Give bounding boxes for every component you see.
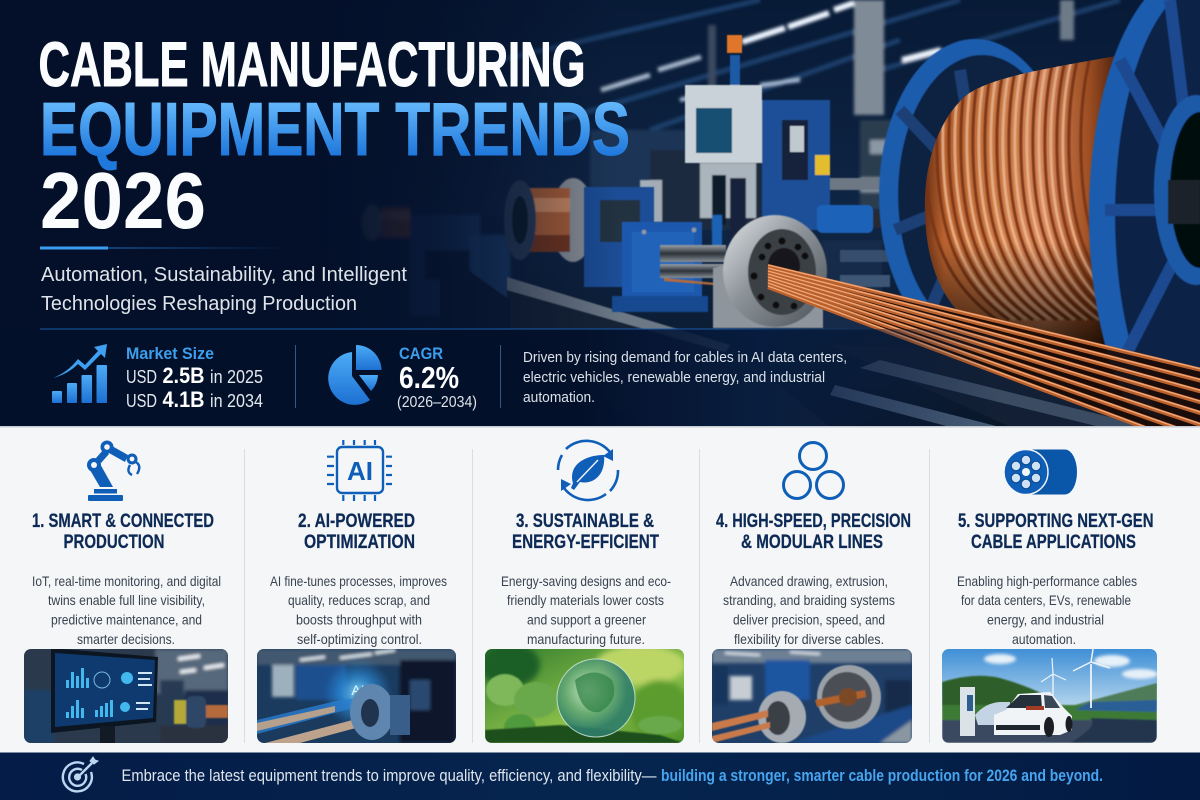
icon: cable cross-section <box>1004 450 1077 494</box>
title: EQUIPMENT TRENDS <box>40 87 630 171</box>
demand drivers text: automation. <box>523 390 595 406</box>
title <box>38 30 630 245</box>
heading: CABLE APPLICATIONS <box>971 532 1136 553</box>
description: flexibility for diverse cables. <box>734 632 884 647</box>
panel: hero factory scene <box>0 0 1200 460</box>
card 4: high-speed precision modular lines <box>712 442 912 743</box>
front spool flange <box>1089 0 1200 460</box>
copper strands <box>767 264 1200 426</box>
heading <box>32 511 214 553</box>
market size stat: in 2025 <box>210 366 263 387</box>
call to action text: Embrace the latest equipment trends to improve quality, efficiency, and flexibility— <box>122 767 657 785</box>
blue machine block <box>584 187 708 312</box>
copper coil drum <box>924 56 1115 345</box>
photo: monitoring dashboard <box>24 648 228 743</box>
description: Energy-saving designs and eco- <box>501 574 671 589</box>
wind turbines <box>1041 649 1110 708</box>
description: stranding, and braiding systems <box>723 593 895 608</box>
card 5: next-gen cable applications <box>942 450 1158 743</box>
ceiling lights and structure <box>500 0 1120 210</box>
panel: stats strip <box>0 328 1000 427</box>
heading: 5. SUPPORTING NEXT-GEN <box>958 511 1154 532</box>
description: smarter decisions. <box>77 632 175 647</box>
icon: three rings <box>784 442 844 498</box>
demand drivers text: electric vehicles, renewable energy, and industrial <box>523 370 825 386</box>
accent rule <box>40 246 288 250</box>
control cabinet <box>685 35 890 287</box>
demand drivers text: Driven by rising demand for cables in AI data centers, <box>523 350 847 366</box>
description: quality, reduces scrap, and <box>288 593 430 608</box>
demand drivers text <box>523 350 847 406</box>
icon: AI chip <box>327 440 392 501</box>
description <box>501 574 671 647</box>
description: boosts throughput with <box>296 612 422 628</box>
description: deliver precision, speed, and <box>733 612 885 628</box>
description: manufacturing future. <box>527 632 645 647</box>
photo: glass globe in leaves <box>485 649 684 743</box>
card 2: AI-powered optimization <box>257 440 456 743</box>
description: Enabling high-performance cables <box>957 574 1137 589</box>
heading: ENERGY-EFFICIENT <box>512 532 659 553</box>
heading: 4. HIGH-SPEED, PRECISION <box>716 511 911 532</box>
heading <box>298 511 415 553</box>
steel hub disc <box>713 215 827 328</box>
subtitle <box>41 263 407 315</box>
back spool flange <box>878 38 1034 350</box>
panel: trends section <box>0 426 1200 753</box>
CAGR stat: (2026–2034) <box>397 394 477 411</box>
market size stat: in 2034 <box>210 390 263 411</box>
icon: growth chart <box>52 344 107 403</box>
description <box>723 574 895 647</box>
description: automation. <box>1012 632 1076 647</box>
call to action text <box>122 767 1103 785</box>
card 3: sustainable and energy-efficient <box>480 441 690 743</box>
description: IoT, real-time monitoring, and digital <box>32 574 221 589</box>
photo: EV charging with wind turbines <box>942 649 1158 743</box>
distant machinery <box>363 206 512 314</box>
subtitle: Automation, Sustainability, and Intelligent <box>41 263 407 286</box>
heading <box>716 511 911 553</box>
CAGR stat: 6.2% <box>399 360 459 395</box>
heading <box>958 511 1154 553</box>
photo: AI cable machine: AI <box>351 682 365 698</box>
call to action text: building a stronger, smarter cable production for 2026 and beyond. <box>661 767 1103 785</box>
machine base rail <box>440 272 730 352</box>
description: Advanced drawing, extrusion, <box>730 574 888 589</box>
photo: AI cable machine <box>257 649 456 743</box>
icon: leaf in cycle arrows <box>558 441 618 500</box>
heading: & MODULAR LINES <box>741 532 883 553</box>
icon: AI chip: AI <box>347 456 373 486</box>
description: twins enable full line visibility, <box>48 593 205 608</box>
description: energy, and industrial <box>987 612 1104 628</box>
description <box>270 574 447 647</box>
market size stat: USD <box>126 390 157 411</box>
description: AI fine-tunes processes, improves <box>270 574 447 589</box>
market size stat: 4.1B <box>162 387 204 412</box>
description: friendly materials lower costs <box>507 593 664 608</box>
heading: 3. SUSTAINABLE & <box>516 511 654 532</box>
description <box>957 574 1137 647</box>
small copper spool <box>504 178 595 262</box>
market size stat: USD <box>126 366 157 387</box>
title: 2026 <box>40 156 206 245</box>
heading: 1. SMART & CONNECTED <box>32 511 214 532</box>
dashboard monitor <box>51 648 158 743</box>
panel: closing banner <box>0 752 1200 800</box>
icon: pie chart <box>328 345 382 405</box>
icon: robot arm <box>87 440 139 501</box>
left dark overlay <box>0 0 620 330</box>
market size stat: Market Size <box>126 344 214 363</box>
heading: OPTIMIZATION <box>304 532 415 553</box>
icon: target with arrow <box>63 757 98 791</box>
heading: 2. AI-POWERED <box>298 511 415 532</box>
heading: PRODUCTION <box>64 532 164 553</box>
CAGR stat: CAGR <box>399 344 443 363</box>
description: for data centers, EVs, renewable <box>961 593 1131 608</box>
market size stat <box>126 344 263 412</box>
market size stat: 2.5B <box>162 363 204 388</box>
EV charger and cars <box>960 687 1072 737</box>
description <box>32 574 221 647</box>
CAGR stat <box>397 344 477 411</box>
card 1: smart and connected production <box>24 440 228 743</box>
subtitle: Technologies Reshaping Production <box>41 292 357 315</box>
heading <box>512 511 659 553</box>
photo: stranding machine <box>712 649 912 743</box>
description: predictive maintenance, and <box>51 612 202 628</box>
rail beams bottom right <box>830 349 1165 426</box>
mid machinery behind the hub <box>640 150 882 330</box>
description: self-optimizing control. <box>297 632 422 647</box>
silver rods <box>660 245 726 286</box>
title: CABLE MANUFACTURING <box>38 30 586 100</box>
description: and support a greener <box>527 612 646 628</box>
